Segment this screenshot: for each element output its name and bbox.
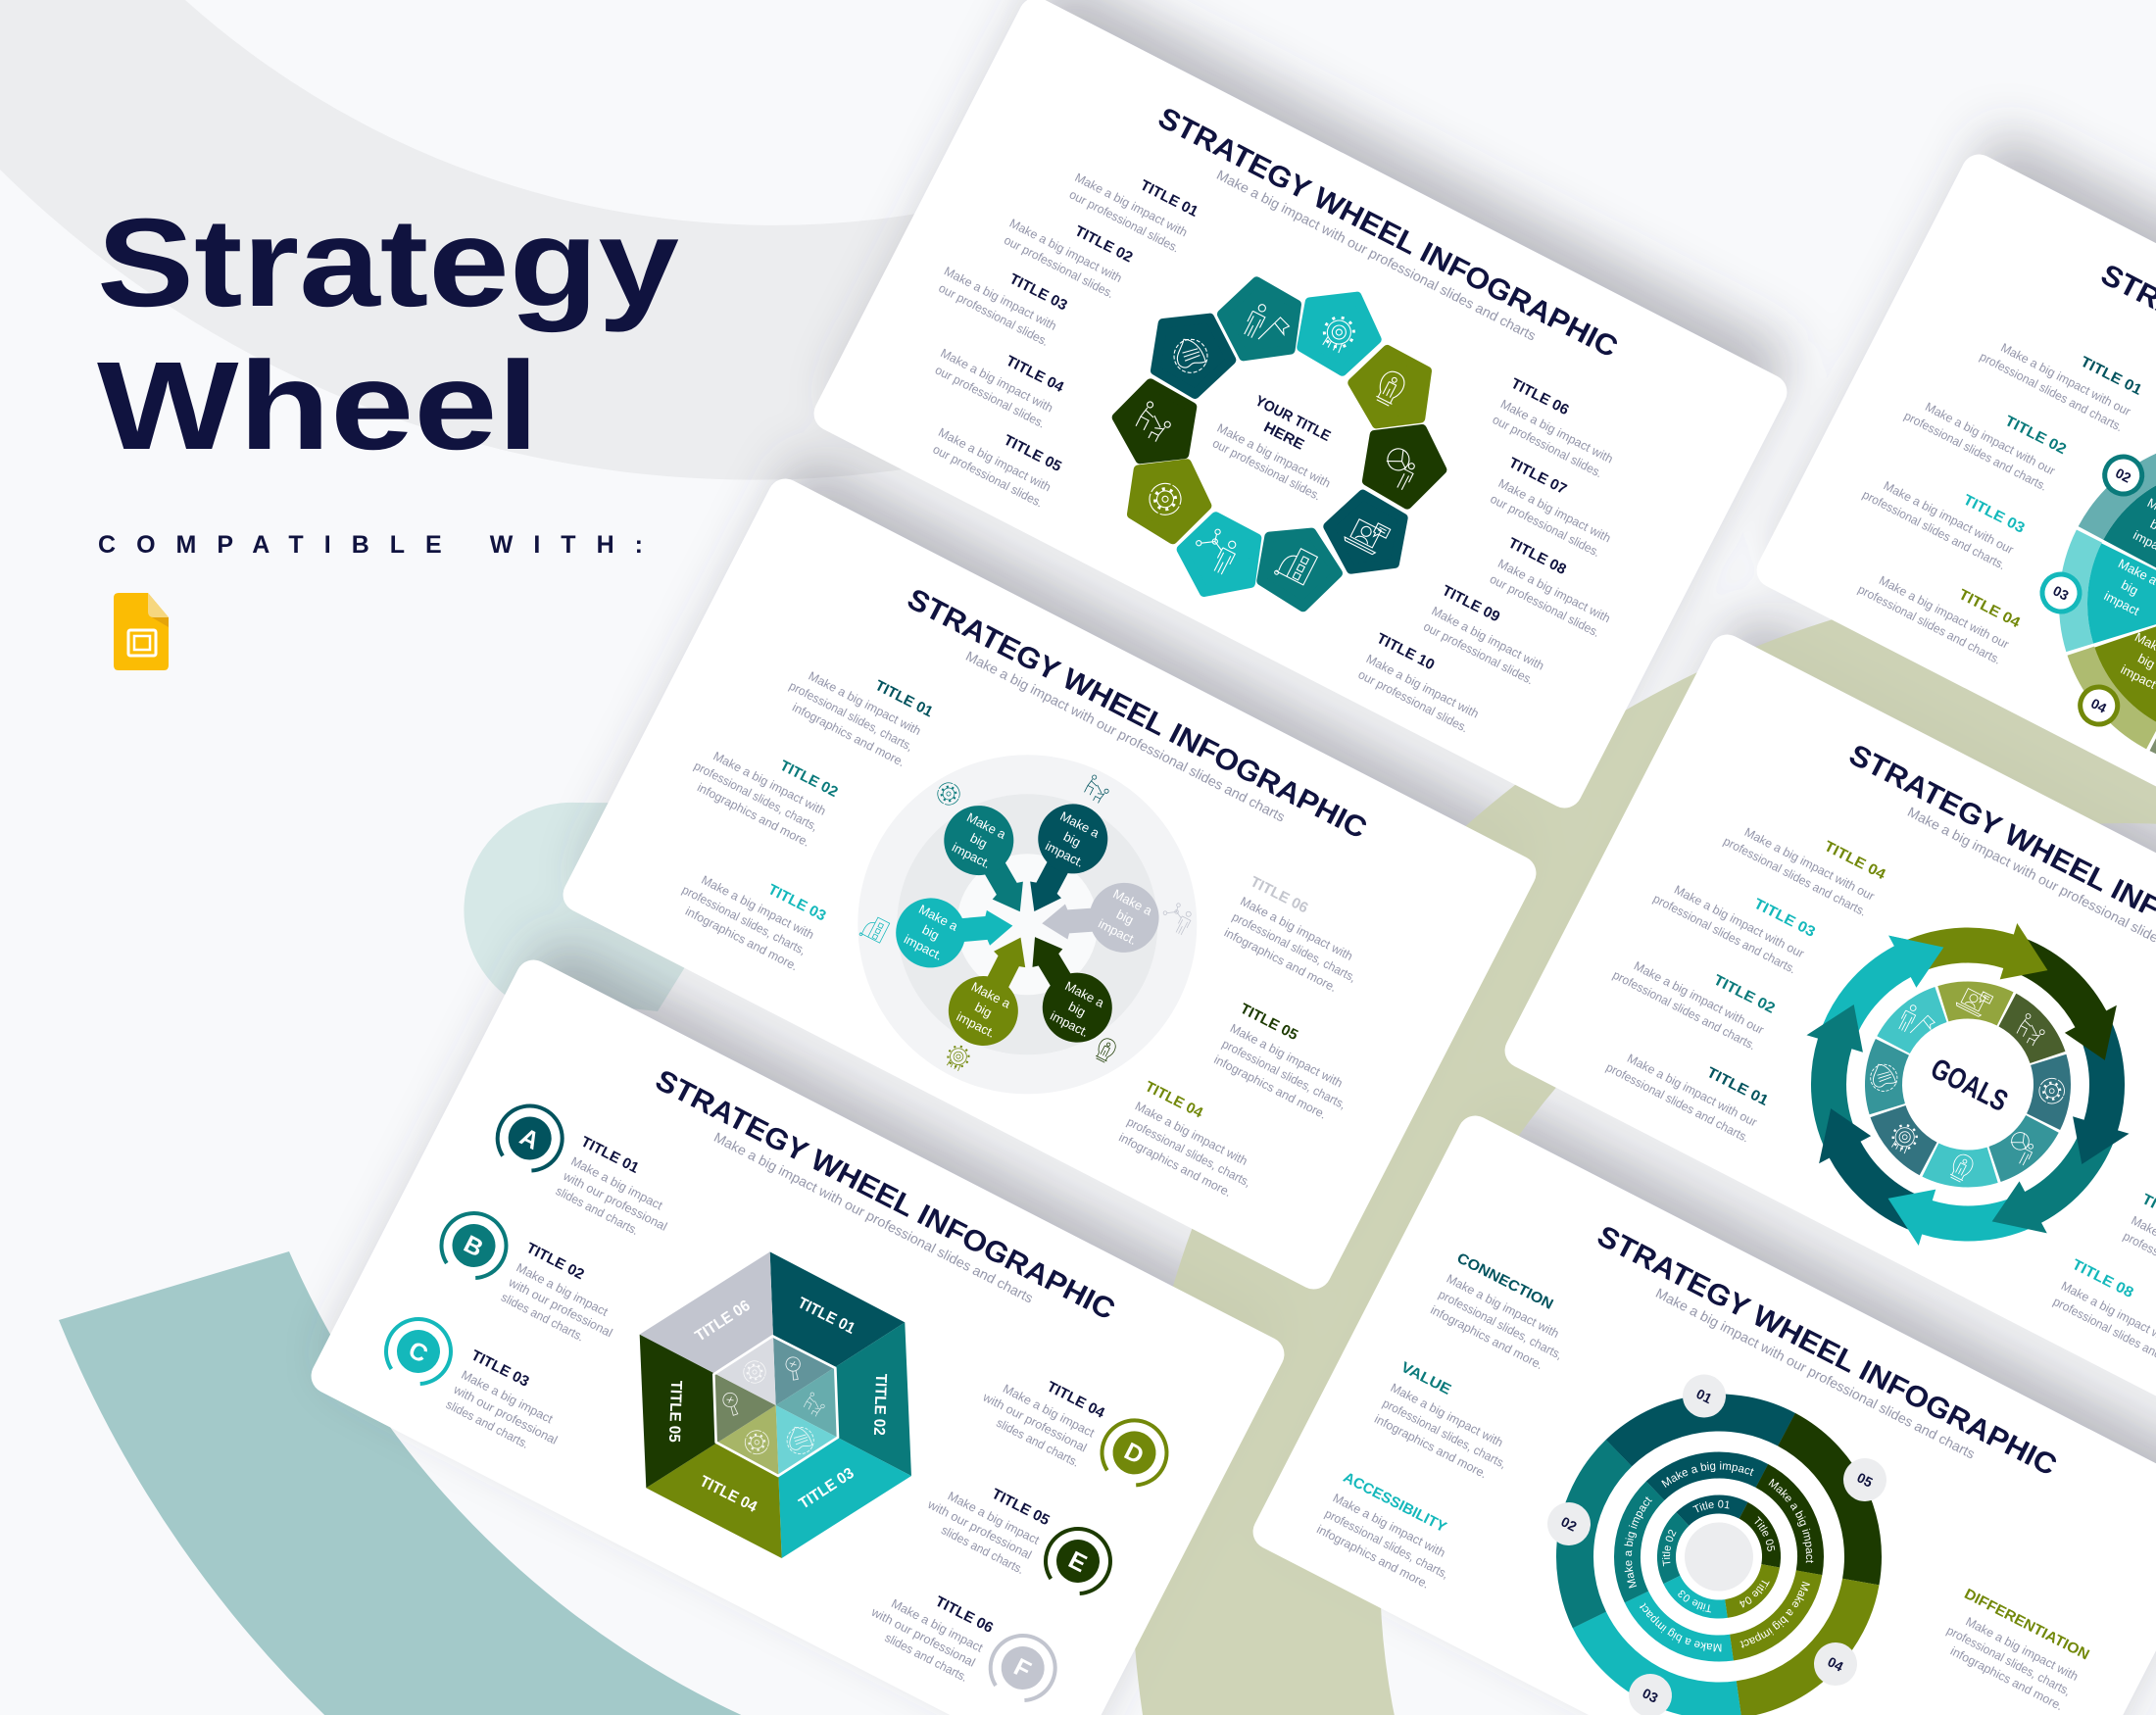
hexagon labels: TITLE 06 xyxy=(693,1298,754,1346)
slide 4 text content: TITLE 02 xyxy=(2002,413,2069,458)
pin labels: Make a xyxy=(969,979,1013,1011)
slide 1 text content: our professional slides. xyxy=(1491,413,1604,480)
arrow pins xyxy=(893,792,1161,1057)
pin labels: Make a xyxy=(1062,978,1107,1010)
number badge 01: 01 xyxy=(1693,1386,1715,1406)
slide 1 text content: our professional slides. xyxy=(1356,667,1470,735)
slide 2 text content: professional slides, charts, xyxy=(680,883,808,957)
number badge 05 xyxy=(1836,1450,1894,1509)
slide 5 text content: TITLE 02 xyxy=(1711,971,1778,1017)
slide 3 text content: with our professional xyxy=(451,1382,560,1447)
slide 6 text content: Make a big impact with our professional slides and charts xyxy=(1653,1285,1978,1462)
slide 2 text content: STRATEGY WHEEL INFOGRAPHIC xyxy=(902,583,1372,846)
inner segment icons xyxy=(1866,983,2069,1184)
number badge 03 xyxy=(2035,567,2086,618)
curved ring labels xyxy=(1624,1461,1813,1652)
badge A: A xyxy=(515,1123,544,1155)
slide 1 text content: Make a big impact with xyxy=(936,425,1054,495)
slide 1 text content: HERE xyxy=(1261,418,1307,454)
slide 3 text content: slides and charts. xyxy=(444,1397,531,1451)
slide 1 text content: TITLE 05 xyxy=(1001,432,1064,475)
number badge 04: 04 xyxy=(1825,1653,1846,1675)
badge C: C xyxy=(404,1336,432,1368)
slide 1 text content: STRATEGY WHEEL INFOGRAPHIC xyxy=(1152,102,1623,365)
hexagon icons xyxy=(721,1356,828,1458)
slide 1 text content: Make a big impact with xyxy=(1364,652,1481,721)
hexagon wedges xyxy=(640,1251,911,1558)
slide 3 text content: slides and charts. xyxy=(939,1523,1026,1577)
panel: slide 5, goals wheel xyxy=(1498,628,2156,1451)
slide 6 text content: ACCESSIBILITY xyxy=(1341,1469,1449,1536)
number badge 03: 03 xyxy=(2050,582,2072,604)
slide 5 text content: TITLE 03 xyxy=(1751,896,1818,941)
concentric ring chart xyxy=(1515,1353,1923,1715)
curved ring labels: Make a big impact xyxy=(1768,1478,1813,1563)
number badge 03: 03 xyxy=(1640,1685,1661,1706)
curved ring labels: Title 04 xyxy=(1740,1580,1770,1607)
slide 1 text content: TITLE 09 xyxy=(1440,582,1502,625)
pin icons xyxy=(859,774,1196,1073)
slide 2 text content: Make a big impact with xyxy=(711,749,828,818)
slide 1 text content: TITLE 06 xyxy=(1508,375,1572,418)
slide 1 text content: our professional slides. xyxy=(1210,436,1323,503)
slide 2 text content: professional slides, charts, xyxy=(787,679,915,754)
slide 1 text content: TITLE 08 xyxy=(1505,535,1569,578)
slide 6 text content: infographics and more. xyxy=(1314,1522,1432,1592)
slide 4 text content: professional slides and charts. xyxy=(1860,488,2008,572)
slide 6 text content: Make a big impact with xyxy=(1331,1491,1447,1560)
pin labels: Make a xyxy=(964,809,1009,842)
slide 2 text content: TITLE 04 xyxy=(1142,1078,1206,1122)
hexagon labels: TITLE 03 xyxy=(797,1465,858,1513)
slide 6 text content: Make a big impact with xyxy=(1445,1272,1561,1341)
slide 3 text content: with our professional xyxy=(925,1497,1034,1562)
hexagon labels: TITLE 02 xyxy=(870,1373,889,1436)
slide 2 text content: TITLE 03 xyxy=(765,881,829,924)
pin labels: Make a xyxy=(1057,808,1102,841)
slide 1 text content: our professional slides. xyxy=(936,281,1051,349)
slide 2 text content: infographics and more. xyxy=(695,780,811,850)
badge A xyxy=(488,1095,573,1178)
slide 2 text content: professional slides, charts, xyxy=(1220,1037,1348,1112)
slide 3 text content: with our professional xyxy=(561,1168,669,1234)
slide 1 text content: Make a big impact with xyxy=(1215,421,1333,491)
number badge 01 xyxy=(1675,1367,1734,1425)
slide 3 text content: TITLE 03 xyxy=(468,1347,532,1391)
slide 6 text content: Make a big impact with xyxy=(1389,1381,1505,1449)
pin labels xyxy=(902,808,1155,1041)
slide 3 text content: with our professional xyxy=(868,1604,977,1670)
decorative teal arc, bottom left xyxy=(59,1251,1126,1715)
slide 3 text content: Make a big impact xyxy=(1001,1382,1097,1441)
slide 3 text content: Make a big impact xyxy=(946,1489,1042,1547)
badge D xyxy=(1093,1409,1178,1493)
slide 6 text content: professional slides, charts, xyxy=(1944,1624,2073,1698)
heading: Strategy Wheel: Strategy xyxy=(97,193,679,333)
badge B: B xyxy=(460,1230,487,1262)
slide 2 text content: Make a big impact with xyxy=(807,669,923,738)
slide 1 text content: our professional slides. xyxy=(931,442,1045,511)
badge F xyxy=(981,1625,1066,1707)
slide 2 text content: infographics and more. xyxy=(683,905,800,973)
pin labels: impact. xyxy=(902,931,945,963)
slide 1 text content: YOUR TITLE xyxy=(1252,392,1333,445)
slide 5 text content: professional slides and charts. xyxy=(1610,968,1758,1053)
pin labels: impact. xyxy=(955,1008,998,1041)
pin labels: Make a xyxy=(916,902,961,934)
number badge 05: 05 xyxy=(1854,1469,1876,1491)
slide 1 text content: TITLE 02 xyxy=(1072,222,1136,267)
slide 6 text content: professional slides, charts, xyxy=(1437,1288,1564,1362)
slide 2 text content xyxy=(557,472,1543,1296)
circular arrows xyxy=(1757,873,2156,1296)
slide 1 text content: Make a big impact with xyxy=(1072,171,1190,239)
slide 3 text content: slides and charts. xyxy=(883,1631,970,1685)
slide 3 text content: TITLE 04 xyxy=(1044,1378,1108,1422)
slide 4 text content: Make a big impact with our xyxy=(1877,573,2011,652)
badge F: F xyxy=(1009,1653,1035,1685)
decorative pale teal shape xyxy=(464,803,784,1011)
slide 3 text content: STRATEGY WHEEL INFOGRAPHIC xyxy=(650,1064,1120,1327)
slide 3 text content: slides and charts. xyxy=(994,1416,1081,1470)
slide 3 text content: with our professional xyxy=(980,1390,1089,1455)
slide 2 text content: infographics and more. xyxy=(1222,925,1339,995)
slide 2 text content: infographics and more. xyxy=(790,701,907,769)
slide 3 text content: TITLE 05 xyxy=(989,1486,1053,1529)
badge B xyxy=(432,1202,517,1285)
pin labels: impact. xyxy=(950,840,993,871)
slide 3 text content: with our professional xyxy=(506,1275,614,1340)
number badge 02 xyxy=(1540,1494,1598,1553)
slide 1 text content: TITLE 04 xyxy=(1004,353,1067,396)
slide 1 text content: Make a big impact with xyxy=(942,264,1058,333)
slide 3 text content: TITLE 01 xyxy=(578,1133,642,1177)
hexagon labels: TITLE 05 xyxy=(665,1380,684,1443)
slide 6 text content: Make a big impact with xyxy=(1963,1614,2081,1684)
slide 3 text content: TITLE 06 xyxy=(932,1593,996,1637)
curved ring labels: Title 03 xyxy=(1678,1590,1711,1613)
slide 5 text content: Make a big impact with our xyxy=(1632,959,1766,1037)
slide 1 text content: Make a big impact with xyxy=(1495,557,1613,625)
pin labels: big xyxy=(1061,829,1083,850)
slide 4 text content: Make a big impact with our xyxy=(1923,400,2057,478)
curved ring labels: Make a big impact xyxy=(1639,1603,1721,1652)
slide 2 text content: Make a big impact with our professional slides and charts xyxy=(963,648,1288,825)
slide 1 text content: our professional slides. xyxy=(1002,233,1116,301)
slide 1 text content xyxy=(808,0,1793,814)
slide 4 text content: Make a big impact with our xyxy=(1998,341,2132,418)
number badge 02 xyxy=(2098,450,2148,501)
pin labels: impact. xyxy=(1096,916,1139,948)
slide 5 text content: TITLE 04 xyxy=(1822,838,1888,884)
heading: Strategy Wheel xyxy=(97,193,679,476)
slide 4 text content: TITLE 03 xyxy=(1960,491,2028,537)
slide 2 text content: Make a big impact with xyxy=(1228,1021,1345,1091)
curved ring labels: Title 01 xyxy=(1692,1499,1729,1513)
panel: slide 1, pentagon wheel xyxy=(808,0,1793,814)
slide 5 text content: Make a big impact with our xyxy=(1742,825,1877,904)
slide 2 text content: professional slides, charts, xyxy=(692,759,820,834)
panel: slide 4, pie wheel xyxy=(1750,148,2156,971)
slide 2 text content: infographics and more. xyxy=(1211,1053,1329,1122)
slide 4 text content: TITLE 04 xyxy=(1956,586,2024,632)
icon: Google Slides xyxy=(114,593,169,670)
curved ring labels: Title 05 xyxy=(1754,1516,1776,1551)
slide 1 text content: Make a big impact with xyxy=(1007,217,1124,285)
slide 2 text content: Make a big impact with xyxy=(1133,1099,1250,1168)
slide 1 text content: our professional slides. xyxy=(1067,187,1182,255)
hexagon labels: TITLE 01 xyxy=(795,1295,858,1338)
slide 2 text content: Make a big impact with xyxy=(699,873,816,942)
panel: slide 3, hexagon xyxy=(305,954,1291,1715)
slide 3 text content: Make a big impact xyxy=(889,1596,986,1655)
badge C xyxy=(377,1308,462,1391)
slide 6 text content: professional slides, charts, xyxy=(1380,1396,1508,1471)
pie wedges xyxy=(2020,400,2156,808)
slide 1 text content: our professional slides. xyxy=(1421,619,1536,687)
badge E: E xyxy=(1064,1546,1091,1578)
slide 1 text content: our professional slides. xyxy=(1488,572,1602,640)
pie labels: big xyxy=(2119,577,2140,598)
slide 1 text content: TITLE 03 xyxy=(1006,270,1070,314)
slide 4 text content: professional slides and charts. xyxy=(1902,409,2049,494)
pie labels: impact xyxy=(2102,588,2142,618)
slide 5 text content: TITLE 08 xyxy=(2069,1256,2136,1301)
slide 4 text content: TITLE 01 xyxy=(2078,354,2144,399)
slide 1 text content: Make a big impact with xyxy=(938,346,1055,416)
concentric background circles xyxy=(858,755,1197,1094)
slide 6 text content: infographics and more. xyxy=(1948,1644,2065,1713)
pin labels: big xyxy=(972,1000,995,1020)
decorative grey arc, top left xyxy=(0,0,980,480)
hexagon labels xyxy=(665,1295,889,1516)
pin labels: big xyxy=(968,830,990,851)
curved ring labels: Title 02 xyxy=(1662,1529,1676,1566)
slide 6 text content xyxy=(1247,1109,2156,1715)
slide 5 text content: professional slides and charts. xyxy=(1721,834,1869,919)
slide 1 text content: our professional slides. xyxy=(1488,492,1602,560)
curved ring labels: Make a big impact xyxy=(1740,1582,1810,1648)
slide 2 text content: TITLE 01 xyxy=(872,677,936,720)
slide 1 text content: our professional slides. xyxy=(933,363,1048,431)
panel: slide 6, concentric rings xyxy=(1252,1115,2156,1715)
slide 5 text content: Make a big impact with our xyxy=(1672,883,1806,960)
pin labels: big xyxy=(1066,999,1088,1019)
slide 3 text content: slides and charts. xyxy=(499,1291,586,1345)
slide 3 text content: Make a big impact xyxy=(568,1154,665,1213)
slide 2 text content: professional slides, charts, xyxy=(1125,1114,1253,1190)
pentagon icons xyxy=(1134,302,1421,588)
slide 2 text content: TITLE 02 xyxy=(777,758,841,801)
slide 3 text content: Make a big impact xyxy=(514,1260,611,1319)
number badge 02: 02 xyxy=(1558,1513,1580,1535)
text: compatible with: COMPATIBLE WITH: xyxy=(98,531,643,559)
slide 6 text content: professional slides, charts, xyxy=(1322,1506,1450,1582)
slide 1 text content: Make a big impact with xyxy=(1498,397,1615,466)
slide 1 text content: TITLE 10 xyxy=(1374,630,1438,673)
slide 6 text content: DIFFERENTIATION xyxy=(1962,1586,2092,1663)
slide 4 text content: professional slides and charts. xyxy=(1978,350,2125,434)
hexagon labels: TITLE 04 xyxy=(697,1473,760,1516)
slide 1 text content: Make a big impact with xyxy=(1430,604,1546,673)
slide 6 text content: STRATEGY WHEEL INFOGRAPHIC xyxy=(1592,1220,2062,1483)
number badge 03 xyxy=(1621,1666,1680,1715)
number badge 04: 04 xyxy=(2088,695,2109,716)
pentagon ring xyxy=(1117,281,1442,607)
centre label: goals: GOALS xyxy=(1926,1053,2013,1118)
curved ring labels: Make a big impact xyxy=(1624,1496,1652,1589)
decorative olive ring xyxy=(1256,700,2156,1715)
slide 4 text content xyxy=(1750,148,2156,971)
slide 2 text content: TITLE 06 xyxy=(1248,873,1311,917)
pie labels xyxy=(2100,495,2156,693)
heading: Strategy Wheel: Wheel xyxy=(97,336,539,476)
slide 2 text content: infographics and more. xyxy=(1116,1131,1234,1200)
slide 2 text content: Make a big impact with xyxy=(1238,894,1355,963)
slide 4 text content: professional slides and charts. xyxy=(1855,582,2003,667)
slide 1 text content: Make a big impact with xyxy=(1496,476,1613,545)
inner segments ring xyxy=(1854,970,2082,1199)
slide 1 text content: TITLE 01 xyxy=(1138,176,1200,220)
badge D: D xyxy=(1120,1438,1148,1470)
number badge 04 xyxy=(1806,1635,1865,1693)
slide 3 text content: slides and charts. xyxy=(554,1184,641,1238)
slide 3 text content: Make a big impact xyxy=(459,1368,556,1427)
pin labels: big xyxy=(920,922,942,943)
slide 6 text content: infographics and more. xyxy=(1372,1412,1490,1481)
slide 5 text content xyxy=(1498,628,2156,1451)
number badge 04 xyxy=(2074,680,2124,731)
slide 6 text content: CONNECTION xyxy=(1454,1250,1556,1313)
slide 3 text content: TITLE 02 xyxy=(523,1240,587,1283)
pin labels: impact. xyxy=(1043,838,1086,870)
slide 1 text content: Make a big impact with our professional slides and charts xyxy=(1214,167,1539,344)
slide 5 text content: professional slides and charts. xyxy=(1603,1060,1751,1145)
slide 5 text content: Make a big impact with our xyxy=(1625,1052,1759,1129)
pin labels: impact. xyxy=(1048,1008,1091,1040)
pin labels: Make a xyxy=(1110,886,1155,918)
curved ring labels: Make a big impact xyxy=(1661,1461,1754,1488)
slide 2 text content: TITLE 05 xyxy=(1238,1001,1300,1044)
panel: slide 2, arrow pins wheel xyxy=(557,472,1543,1296)
slide 3 text content: Make a big impact with our professional slides and charts xyxy=(711,1129,1036,1306)
slide 3 text content xyxy=(305,954,1291,1715)
slide 6 text content: infographics and more. xyxy=(1428,1303,1545,1372)
number badge 02: 02 xyxy=(2113,465,2133,486)
slide 1 text content: TITLE 07 xyxy=(1506,455,1569,498)
slide 2 text content: professional slides, charts, xyxy=(1230,909,1358,985)
pin labels: big xyxy=(1114,906,1136,927)
slide 5 text content: professional slides and charts. xyxy=(1650,892,1798,976)
badge E xyxy=(1037,1518,1121,1600)
slide 4 text content: Make a big impact with our xyxy=(1882,478,2016,557)
slide 6 text content: VALUE xyxy=(1398,1359,1453,1398)
slide 5 text content: TITLE 01 xyxy=(1704,1064,1771,1109)
